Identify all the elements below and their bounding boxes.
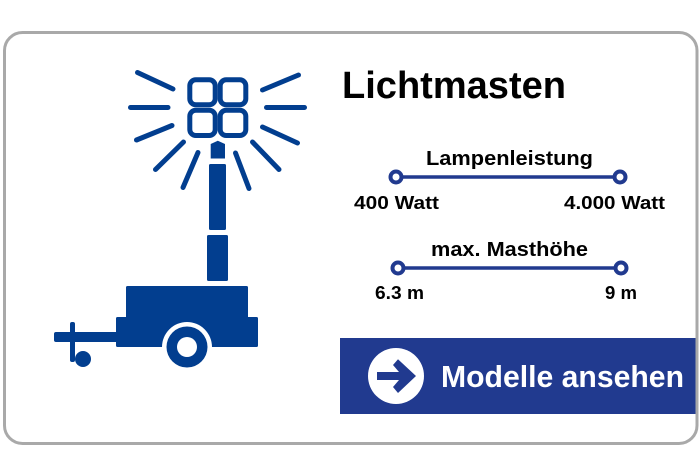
button label: Modelle ansehen [441, 359, 684, 394]
button: Modelle ansehen [340, 338, 696, 414]
range: Lampenleistung [354, 148, 665, 213]
value: 4.000 Watt: 4.000 Watt [564, 193, 665, 213]
value: 6.3 m: 6.3 m [375, 283, 424, 303]
value: 9 m: 9 m [605, 283, 637, 303]
range line [390, 172, 626, 182]
icon: light tower trailer [54, 72, 304, 368]
icon: lamp cluster [190, 80, 246, 136]
icon: light rays [130, 72, 304, 188]
label: max. Masthöhe: max. Masthöhe [431, 239, 588, 261]
icon: wheel [166, 326, 208, 368]
label: Lampenleistung: Lampenleistung [426, 148, 593, 170]
icon: mast sections [207, 141, 228, 281]
icon: trailer body [116, 286, 258, 347]
icon: arrow in circle [368, 348, 424, 404]
value: 400 Watt: 400 Watt [354, 193, 439, 213]
title: Lichtmasten [342, 65, 566, 107]
icon: tow bar and jockey wheel [54, 322, 118, 367]
range line [392, 262, 626, 274]
range: max. Masthöhe [375, 239, 637, 303]
